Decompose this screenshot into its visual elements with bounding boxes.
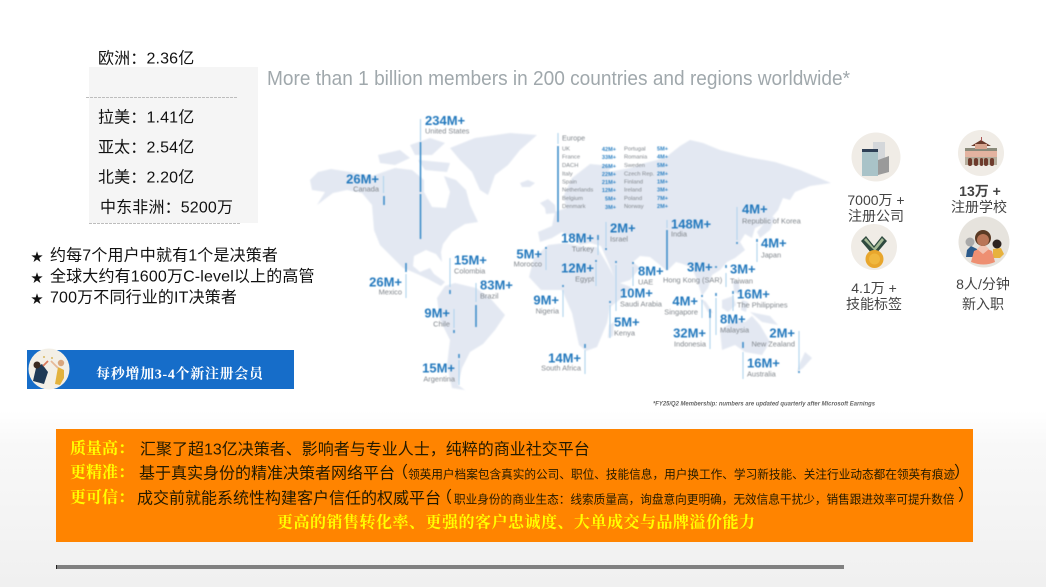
stat: new hires per minute: 8人/分钟 [956, 276, 1010, 292]
label: Hong Kong: Hong Kong (SAR) [663, 276, 722, 284]
label: Europe table: Ireland [624, 188, 642, 194]
label: Malaysia: 8M+ [720, 312, 746, 326]
label: Australia: Australia [747, 370, 777, 378]
label: Canada [346, 172, 384, 205]
label: Australia [743, 342, 780, 379]
label: Singapore [664, 294, 702, 318]
label: Japan [757, 236, 787, 262]
label: South Africa: 14M+ [548, 350, 581, 366]
label: South Africa [541, 344, 585, 374]
label: Israel: 2M+ [610, 220, 636, 236]
label: UAE: UAE [638, 278, 653, 286]
label: Australia: 16M+ [747, 356, 780, 370]
line: trust: 更可信： [70, 488, 134, 506]
label: Nigeria: Nigeria [536, 306, 560, 316]
label: New Zealand [751, 326, 799, 373]
label: The Philippines: 16M+ [737, 286, 770, 302]
label: Europe table: Finland [624, 179, 643, 185]
icon: three people [966, 230, 1004, 264]
label: Chile: 9M+ [424, 306, 450, 320]
label: Kenya: 5M+ [614, 314, 640, 330]
label: Turkey: Turkey [572, 244, 594, 254]
label: Egypt: Egypt [575, 274, 594, 284]
label: Turkey: 18M+ [561, 230, 594, 246]
line: precision [70, 462, 970, 482]
label: Europe table: Denmark [562, 204, 586, 210]
bullet list: decision makers: ★ [31, 271, 43, 285]
panel: regional member counts: 欧洲：2.36亿 [98, 50, 194, 68]
label: Indonesia [673, 309, 710, 349]
label: Argentina: 15M+ [422, 360, 455, 376]
label: Argentina [422, 354, 459, 385]
label: Europe table: Poland [624, 196, 642, 202]
label: Nigeria [533, 285, 563, 317]
label: Europe table: 3M+ [657, 188, 669, 194]
label: Saudi Arabia: Saudi Arabia [620, 300, 663, 308]
line: trust: （ [436, 488, 452, 506]
label: Chile: Chile [433, 320, 450, 328]
stat: new hires per minute: 新入职 [962, 296, 1004, 312]
panel: regional member counts [86, 50, 258, 224]
line: quality: 质量高： [70, 438, 134, 458]
icon: medal [861, 236, 887, 268]
label: Saudi Arabia: 10M+ [620, 286, 653, 300]
label: Brazil: Brazil [480, 292, 499, 300]
label: Chile [424, 306, 454, 333]
label: Hong Kong [663, 260, 722, 284]
label: Indonesia: Indonesia [674, 340, 707, 348]
label: United States [420, 113, 470, 239]
stat: registered companies: 注册公司 [848, 208, 904, 224]
footnote: *FY25/Q2 Membership: numbers are updated quarterly after Microsoft Earnings [653, 400, 875, 408]
label: UAE: 8M+ [638, 264, 664, 278]
label: Europe table: 12M+ [602, 188, 617, 194]
label: Taiwan: Taiwan [730, 276, 753, 286]
label: Argentina: Argentina [423, 374, 456, 384]
label: Colombia [450, 252, 487, 294]
label: Europe table: 7M+ [657, 196, 669, 202]
label: Europe table: 33M+ [602, 155, 617, 161]
label: Egypt: 12M+ [561, 260, 594, 276]
label: Taiwan: 3M+ [730, 262, 756, 276]
label: Republic of Korea [737, 202, 802, 244]
line: trust: ） [958, 486, 974, 504]
label: Europe table: 2M+ [657, 171, 669, 177]
label: Japan: 4M+ [761, 236, 787, 250]
label: Europe table: 5M+ [605, 196, 617, 202]
icon: school building [965, 137, 997, 166]
line: precision: （ [392, 464, 408, 482]
line: precision: 基于真实身份的精准决策者网络平台 [139, 464, 395, 482]
icon: office building [862, 142, 889, 176]
line: precision: ） [954, 464, 970, 482]
label: Europe table: 2M+ [657, 204, 669, 210]
label: Europe table: Europe [562, 134, 585, 142]
label: Indonesia: 32M+ [673, 326, 706, 340]
label: India [667, 216, 712, 270]
line: quality: 汇聚了超13亿决策者、影响者与专业人士，纯粹的商业社交平台 [140, 440, 590, 458]
label: Mexico: 26M+ [369, 274, 402, 290]
bullet list: decision makers: ★ [31, 250, 43, 264]
label: Europe table: Spain [562, 179, 577, 185]
line: precision: 领英用户档案包含真实的公司、职位、技能信息，用户换工作、学习新技能、关注行业动态都在领英有痕迹 [408, 468, 955, 482]
line: trust [70, 486, 974, 508]
label: Europe table: Czech Rep. [624, 171, 655, 177]
stat: skill tags [846, 224, 902, 312]
panel: value proposition [56, 429, 974, 542]
label: Japan: Japan [761, 250, 781, 260]
label: Brazil [476, 278, 513, 327]
label: Europe table: Italy [562, 171, 573, 177]
stat: registered schools [951, 130, 1007, 215]
bullet list: decision makers [31, 246, 315, 306]
stat: new hires per minute [956, 216, 1010, 312]
panel: regional member counts: 北美：2.20亿 [98, 168, 194, 186]
label: United States: United States [425, 126, 470, 136]
label: Canada: 26M+ [346, 172, 379, 186]
line: precision: 更精准： [70, 462, 134, 482]
label: United States: 234M+ [425, 113, 466, 128]
label: India: India [671, 230, 688, 238]
panel: regional member counts: 亚太：2.54亿 [98, 138, 194, 156]
label: Europe table: 5M+ [657, 163, 669, 169]
label: Egypt [561, 260, 596, 286]
banner: new members per second [27, 348, 294, 390]
label: Morocco: Morocco [514, 260, 542, 268]
label: The Philippines: The Philippines [737, 300, 788, 310]
label: Kenya: Kenya [614, 328, 636, 338]
label: Europe table: Sweden [624, 163, 645, 169]
label: Europe table: UK [562, 146, 570, 152]
label: Europe table: DACH [562, 163, 578, 169]
label: Europe table: 1M+ [657, 179, 669, 185]
stat: skill tags: 4.1万 + [851, 280, 897, 296]
label: Hong Kong: 3M+ [687, 260, 713, 274]
label: Republic of Korea: 4M+ [742, 202, 768, 216]
label: Israel: Israel [610, 234, 628, 244]
label: Taiwan [726, 262, 756, 287]
label: Europe table: France [562, 155, 580, 161]
label: Morocco: 5M+ [516, 246, 542, 262]
label: Europe table: 4M+ [657, 155, 669, 161]
label: Saudi Arabia [616, 261, 663, 311]
stat: registered companies: 7000万 + [847, 192, 905, 208]
label: India: 148M+ [671, 216, 712, 232]
label: Singapore: Singapore [664, 308, 698, 316]
bottom rule [56, 565, 844, 569]
label: Europe table: 26M+ [602, 164, 617, 170]
label: Malaysia [716, 293, 750, 335]
stat: registered schools: 注册学校 [951, 199, 1007, 215]
label: Europe table: 5M+ [657, 146, 669, 152]
label: Israel [606, 220, 636, 250]
label: UAE [633, 262, 664, 286]
stat: registered schools: 13万 + [959, 183, 1001, 199]
label: New Zealand: New Zealand [751, 340, 795, 348]
label: Europe table: 3M+ [605, 205, 617, 211]
label: Mexico [369, 263, 406, 298]
label: Europe table: Norway [624, 204, 644, 210]
bullet list: decision makers: 全球大约有1600万C-level以上的高管 [50, 268, 315, 286]
stat: registered companies [847, 132, 905, 224]
label: Kenya [610, 301, 640, 338]
label: The Philippines [733, 286, 788, 311]
label: Europe table: Portugal [624, 146, 646, 152]
bullet list: decision makers: ★ [31, 292, 43, 306]
bullet list: decision makers: 约每7个用户中就有1个是决策者 [50, 246, 278, 264]
bullet list: decision makers: 700万不同行业的IT决策者 [50, 288, 237, 306]
line: conclusion: 更高的销售转化率、更强的客户忠诚度、大单成交与品牌溢价能力 [277, 512, 755, 532]
label: Colombia: 15M+ [454, 252, 487, 268]
label: Europe table: Romania [624, 155, 648, 161]
label: New Zealand: 2M+ [769, 326, 795, 340]
label: Brazil: 83M+ [480, 278, 513, 292]
icon: two people high-five [28, 348, 70, 390]
line: trust: 成交前就能系统性构建客户信任的权威平台 [137, 490, 441, 508]
label: Europe table: 42M+ [602, 147, 617, 153]
label: Malaysia: Malaysia [720, 326, 750, 334]
panel: regional member counts: 拉美：1.41亿 [98, 108, 194, 126]
banner: new members per second: 每秒增加3-4个新注册会员 [96, 366, 265, 382]
label: Colombia: Colombia [454, 266, 486, 276]
label: Nigeria: 9M+ [533, 292, 559, 308]
map: continents [310, 133, 831, 390]
label: Europe table: 21M+ [602, 180, 617, 186]
label: Europe table: Belgium [562, 196, 583, 202]
label: South Africa: South Africa [541, 364, 582, 372]
label: Canada: Canada [353, 184, 380, 194]
label: Singapore: 4M+ [672, 294, 698, 308]
label: Europe table: Netherlands [562, 188, 593, 194]
line: trust: 职业身份的商业生态：线索质量高，询盘意向更明确，无效信息干扰少，销售跟进效率可提升数倍 [454, 492, 955, 506]
title: More than 1 billion members in 200 countries and regions worldwide* [267, 68, 850, 90]
label: Mexico: Mexico [379, 288, 402, 296]
world map member counts [346, 113, 802, 385]
stat: skill tags: 技能标签 [846, 296, 902, 312]
label: Europe table: 22M+ [602, 172, 617, 178]
label: Turkey [561, 230, 598, 255]
label: Morocco [514, 246, 546, 270]
label: Europe table [558, 133, 669, 222]
panel: regional member counts: 中东非洲：5200万 [100, 198, 233, 216]
label: Republic of Korea: Republic of Korea [742, 216, 802, 226]
